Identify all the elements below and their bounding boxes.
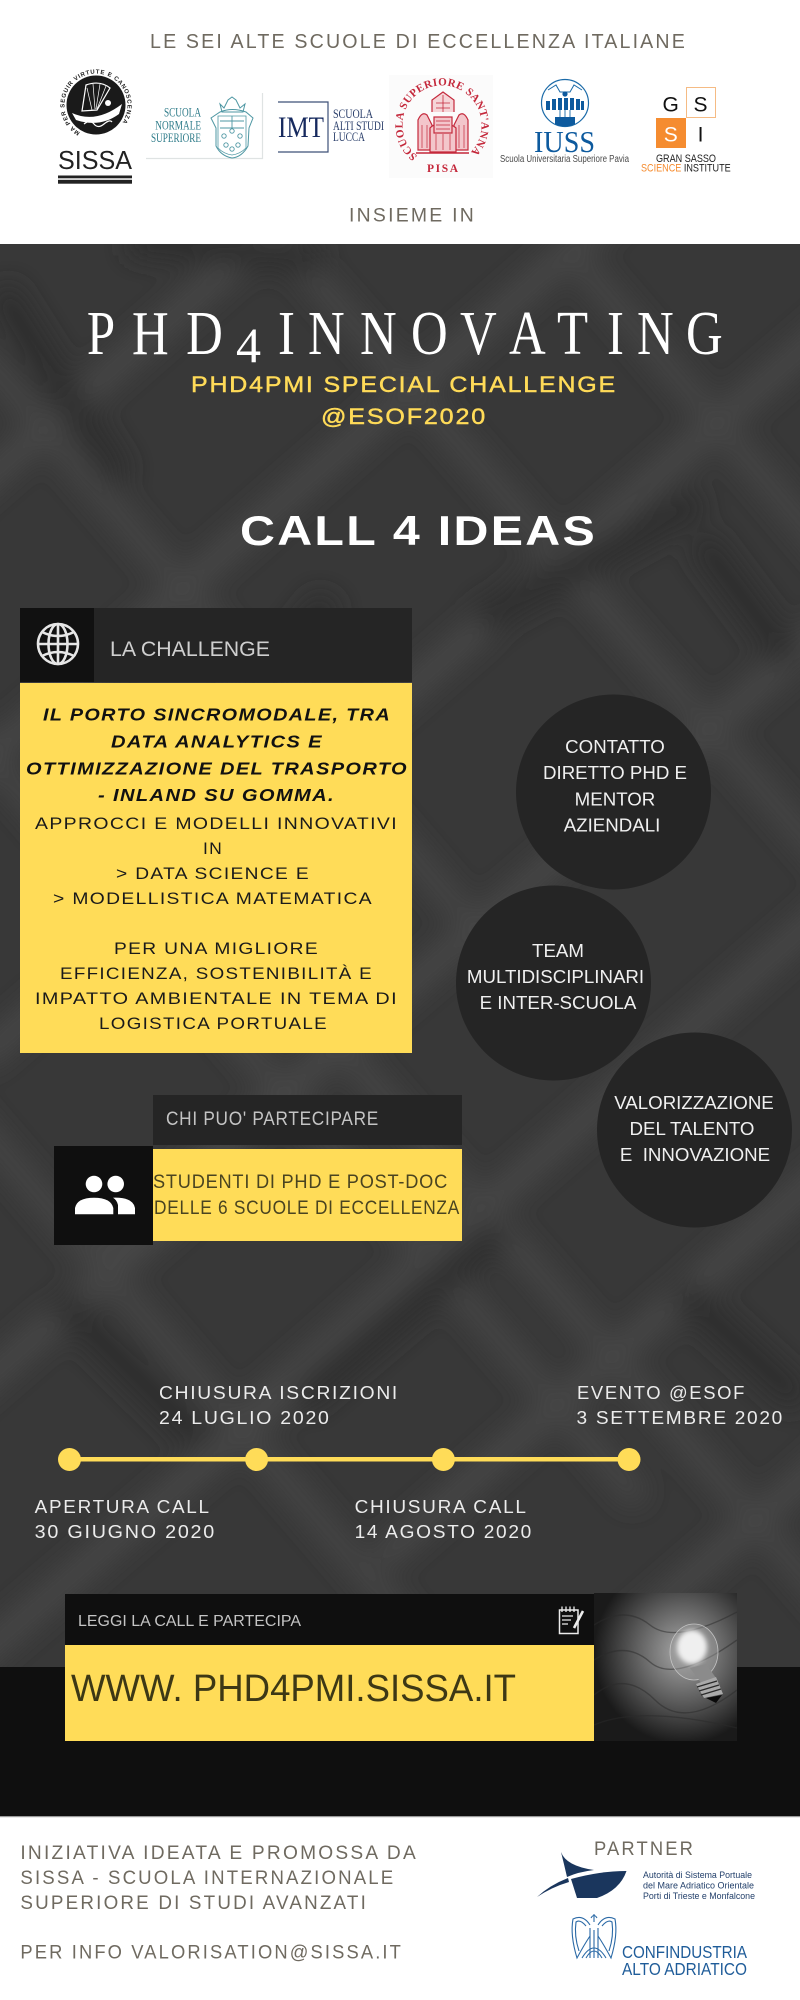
challenge description: IMPATTO AMBIENTALE IN TEMA DI — [35, 989, 398, 1008]
text: per info: PER INFO VALORISATION@SISSA.IT — [20, 1943, 403, 1964]
logo: Sant'Anna: SCUOLA SUPERIORE SANT'ANNA — [395, 78, 489, 160]
header label: LEGGI LA CALL E PARTECIPA — [78, 1613, 301, 1630]
date: chiusura iscrizioni: 24 LUGLIO 2020 — [159, 1408, 331, 1428]
logo: IUSS: IUSS — [534, 124, 595, 159]
yellow text box — [20, 683, 412, 1053]
challenge description: APPROCCI E MODELLI INNOVATIVI — [35, 814, 398, 833]
text: iniziativa: SISSA - SCUOLA INTERNAZIONALE — [20, 1868, 395, 1889]
title: 4 — [236, 317, 261, 373]
logo: IMT: IMT — [278, 111, 324, 144]
challenge description — [35, 814, 398, 1033]
challenge description: PER UNA MIGLIORE — [114, 939, 319, 958]
heading: call 4 ideas: CALL 4 IDEAS — [240, 507, 597, 554]
subtitle: PHD4PMI SPECIAL CHALLENGE — [191, 372, 617, 397]
date: chiusura iscrizioni: CHIUSURA ISCRIZIONI — [159, 1383, 399, 1403]
circle: contatto diretto: CONTATTO — [565, 736, 665, 757]
logo: confindustria — [572, 1914, 747, 1979]
circle: contatto diretto: DIRETTO PHD E — [543, 762, 687, 783]
circle: team multidisciplinari: MULTIDISCIPLINARI — [467, 966, 644, 987]
yellow box — [153, 1149, 462, 1241]
icon: people — [54, 1146, 153, 1245]
timeline — [58, 1448, 640, 1471]
yellow url box — [65, 1645, 594, 1741]
header bar — [20, 608, 412, 682]
logo: SISSA: SISSA — [58, 145, 133, 175]
date: evento esof: EVENTO @ESOF — [577, 1383, 746, 1403]
dark textured background — [0, 180, 800, 1690]
header bar — [65, 1594, 594, 1645]
circle: valorizzazione: VALORIZZAZIONE — [614, 1092, 774, 1113]
logo: IMT — [278, 102, 384, 152]
challenge headline: OTTIMIZZAZIONE DEL TRASPORTO — [26, 758, 408, 778]
challenge description: > DATA SCIENCE E — [116, 864, 310, 883]
circle: valorizzazione — [597, 1032, 792, 1228]
subtitle — [191, 372, 617, 429]
logo: Scuola Normale Superiore: NORMALE — [155, 117, 201, 132]
challenge description: > MODELLISTICA MATEMATICA — [53, 889, 373, 908]
text: partner: PARTNER — [594, 1839, 695, 1860]
date: chiusura iscrizioni — [159, 1383, 399, 1428]
logo: confindustria: ALTO ADRIATICO — [622, 1959, 747, 1979]
black lower band — [0, 1667, 800, 1816]
text: insieme in: INSIEME IN — [349, 206, 476, 227]
logo: autorita portuale: Autorità di Sistema Portuale — [643, 1870, 752, 1881]
text: iniziativa: INIZIATIVA IDEATA E PROMOSSA DA — [20, 1843, 418, 1864]
header label: LA CHALLENGE — [110, 638, 270, 661]
logo: autorita portuale: Porti di Trieste e Monfalcone — [643, 1891, 755, 1902]
title: PHDINNOVATING — [87, 299, 723, 368]
circle: valorizzazione: E INNOVAZIONE — [620, 1144, 770, 1165]
date: apertura call: 30 GIUGNO 2020 — [35, 1522, 216, 1542]
logo: autorita portuale — [537, 1852, 755, 1902]
logo: IUSS — [500, 80, 629, 165]
logo: Sant'Anna: PISA — [427, 163, 459, 175]
panel: leggi la call — [65, 1593, 737, 1741]
date: evento esof: 3 SETTEMBRE 2020 — [576, 1408, 784, 1428]
header bar — [153, 1095, 462, 1145]
circle: team multidisciplinari: E INTER-SCUOLA — [480, 992, 637, 1013]
panel: la challenge — [20, 608, 412, 1053]
circle: contatto diretto: MENTOR — [575, 788, 655, 809]
challenge description: LOGISTICA PORTUALE — [99, 1014, 328, 1033]
heading: le sei alte scuole: LE SEI ALTE SCUOLE DI ECCELLENZA ITALIANE — [150, 31, 687, 53]
challenge headline: DATA ANALYTICS E — [111, 732, 323, 752]
logo: GSSI: GRAN SASSO — [656, 153, 716, 165]
text: iniziativa — [20, 1843, 418, 1914]
challenge headline: IL PORTO SINCROMODALE, TRA — [43, 705, 391, 725]
text: iniziativa: SUPERIORE DI STUDI AVANZATI — [20, 1893, 368, 1914]
logo: IMT: LUCCA — [333, 130, 365, 144]
top white band — [0, 0, 800, 244]
challenge description: IN — [203, 839, 223, 858]
circle: contatto diretto — [516, 694, 711, 890]
challenge headline: - INLAND SU GOMMA. — [98, 785, 335, 805]
circle: valorizzazione: DEL TALENTO — [630, 1118, 754, 1139]
date: apertura call — [35, 1497, 216, 1542]
logo: Scuola Normale Superiore: SCUOLA — [164, 105, 201, 120]
challenge headline — [26, 705, 408, 805]
logo: GSSI — [641, 88, 731, 175]
icon: notepad — [560, 1606, 583, 1634]
logo: GSSI: S — [664, 124, 678, 147]
date: apertura call: APERTURA CALL — [35, 1497, 211, 1517]
logo: IMT: ALTI STUDI — [333, 119, 384, 133]
logo: Scuola Normale Superiore — [146, 93, 262, 159]
panel: chi puo partecipare — [54, 1095, 462, 1245]
date: evento esof — [576, 1383, 784, 1428]
icon: globe — [20, 608, 94, 682]
logo: confindustria: CONFINDUSTRIA — [622, 1942, 747, 1962]
logo: GSSI: SCIENCE INSTITUTE — [641, 163, 731, 175]
circle: team multidisciplinari: TEAM — [532, 940, 584, 961]
eligibility text: STUDENTI DI PHD E POST-DOC — [153, 1172, 448, 1193]
logo: IUSS: Scuola Universitaria Superiore Pavia — [500, 154, 629, 165]
eligibility text: DELLE 6 SCUOLE DI ECCELLENZA — [154, 1198, 460, 1219]
white footer band — [0, 1816, 800, 2000]
photo: light bulb — [594, 1593, 737, 1741]
date: chiusura call: CHIUSURA CALL — [355, 1497, 528, 1517]
logo: Scuola Normale Superiore: SUPERIORE — [151, 130, 201, 145]
logo: GSSI: G — [663, 94, 679, 117]
challenge description: EFFICIENZA, SOSTENIBILITÀ E — [60, 964, 373, 983]
circle: team multidisciplinari — [456, 886, 651, 1080]
url: WWW. PHD4PMI.SISSA.IT — [71, 1668, 516, 1710]
logo: SISSA — [58, 69, 133, 184]
logo: autorita portuale: del Mare Adriatico Orientale — [643, 1880, 754, 1892]
footer divider line — [0, 1816, 800, 1817]
date: chiusura call — [355, 1497, 533, 1542]
logo: IMT: SCUOLA — [333, 107, 373, 121]
logo: SISSA: MA PER SEGUIR VIRTUTE E CANOSCENZA — [60, 69, 132, 136]
subtitle: @ESOF2020 — [321, 404, 487, 429]
circle: contatto diretto: AZIENDALI — [564, 814, 660, 835]
eligibility text — [153, 1172, 460, 1219]
date: chiusura call: 14 AGOSTO 2020 — [355, 1522, 533, 1542]
header label: CHI PUO' PARTECIPARE — [166, 1109, 379, 1130]
logo: GSSI: S — [693, 94, 708, 117]
logo: GSSI: I — [698, 124, 703, 147]
